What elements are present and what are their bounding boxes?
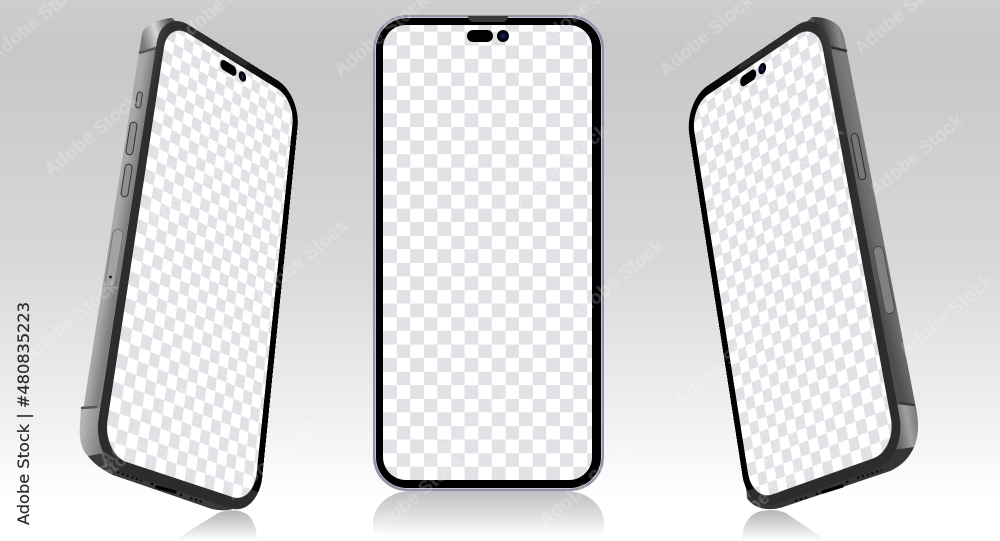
watermark text pattern: Adobe Stock <box>145 140 248 231</box>
watermark text pattern: Adobe Stock <box>250 215 353 306</box>
reflection: center phone <box>373 491 604 541</box>
camera lens <box>758 61 767 76</box>
watermark text pattern: Adobe Stock <box>415 385 518 476</box>
speaker slit <box>223 47 247 67</box>
bezel <box>684 7 907 514</box>
watermark text pattern: Adobe Stock <box>565 235 668 326</box>
watermark text pattern: Adobe Stock <box>670 320 773 411</box>
screen plane with bezel <box>688 21 900 506</box>
phone: center, front view <box>373 15 604 491</box>
watermark text pattern: Adobe Stock <box>20 275 123 366</box>
stock id vertical caption: Adobe Stock | #480835223 <box>14 302 33 525</box>
watermark text pattern: Adobe Stock <box>510 120 613 211</box>
camera lens <box>238 69 247 83</box>
watermark text pattern: Adobe Stock <box>895 270 998 361</box>
watermark text pattern: Adobe Stock <box>755 380 858 471</box>
speaker slit <box>468 16 508 22</box>
phone body side with buttons and ports <box>746 17 918 510</box>
metal frame ring <box>373 15 604 491</box>
dynamic island pill <box>467 30 493 42</box>
watermark text pattern: Adobe Stock <box>535 440 638 531</box>
watermark text pattern: Adobe Stock <box>222 413 325 504</box>
bezel <box>92 8 301 517</box>
screen plane with bezel <box>98 20 298 510</box>
watermark text pattern: Adobe Stock <box>45 435 148 526</box>
reflection: left phone <box>180 510 256 538</box>
watermark text pattern: Adobe Stock <box>745 120 848 211</box>
watermark text pattern: Adobe Stock <box>865 110 968 201</box>
phone body side with buttons and ports <box>80 18 234 510</box>
phone: right, angled view <box>688 17 918 510</box>
dynamic island pill <box>220 58 237 78</box>
checkerboard screen <box>690 21 897 501</box>
watermark text pattern: Adobe Stock <box>865 450 968 541</box>
checkerboard screen <box>383 25 592 480</box>
phone: left, angled view <box>80 18 298 510</box>
reflection: right phone <box>742 510 821 538</box>
camera lens <box>497 30 509 42</box>
watermark text pattern: Adobe Stock <box>715 450 818 541</box>
watermark text pattern: Adobe Stock <box>40 90 143 181</box>
watermark text pattern: Adobe Stock <box>365 450 468 541</box>
dynamic island pill <box>739 68 757 88</box>
checkerboard screen <box>102 21 295 504</box>
watermark text pattern: Adobe Stock <box>95 380 198 471</box>
speaker slit <box>738 50 763 71</box>
